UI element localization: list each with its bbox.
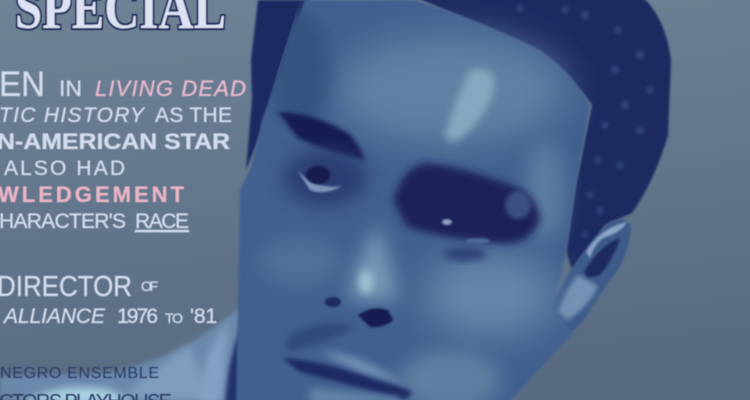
text block: living dead: ALSO HAD [4, 157, 125, 180]
hair texture [516, 4, 654, 238]
text block: theatre credits [0, 365, 172, 400]
text block: living dead: WLEDGEMENT [0, 182, 185, 207]
right eye shine [442, 191, 531, 244]
forehead light [335, 35, 565, 145]
text block: director: DIRECTOR [0, 271, 132, 303]
text block: living dead: EN [0, 65, 45, 104]
ear [540, 220, 631, 336]
text block: director: 1976 [117, 305, 158, 328]
under-eye shadow [443, 247, 487, 261]
text block: director [0, 271, 217, 328]
cheek light [425, 253, 555, 337]
text block: director: TO [165, 310, 183, 326]
hair [246, 0, 310, 170]
top-left temple shadow [270, 10, 330, 130]
text block: living dead: RACE [135, 210, 189, 233]
right brow and eye shadow [393, 163, 540, 244]
face [236, 0, 590, 400]
text block: director: '81 [190, 305, 217, 328]
text block: living dead: IN [59, 76, 82, 101]
shirt and collar [0, 308, 260, 400]
text block: director: OF [141, 278, 158, 294]
text block: director: ALLIANCE [2, 305, 106, 328]
text block: living dead: HARACTER'S [0, 210, 126, 233]
nose light [349, 225, 398, 300]
text block: living dead: TIC HISTORY [0, 104, 146, 127]
text block: living dead [0, 65, 246, 233]
left eyebrow [278, 112, 365, 160]
text block: theatre credits: NEGRO ENSEMBLE [0, 365, 159, 382]
left eye socket [283, 150, 367, 206]
mouth [282, 352, 413, 400]
text block: living dead: AS THE [155, 104, 232, 127]
text block: living dead: N-AMERICAN STAR [0, 129, 230, 154]
text block: living dead: LIVING DEAD [95, 76, 246, 101]
nostrils [285, 297, 393, 352]
left eye [297, 166, 342, 192]
